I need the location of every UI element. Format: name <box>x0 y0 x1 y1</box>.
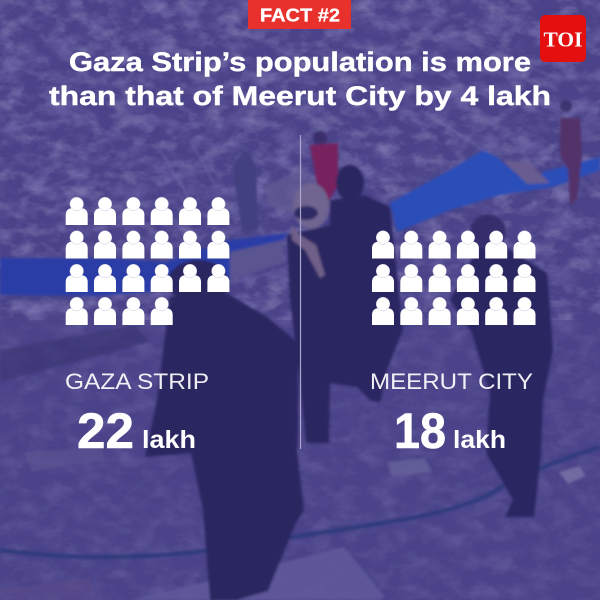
value: 18 lakh: lakh <box>453 426 506 454</box>
value: 18 lakh <box>394 403 506 459</box>
rubble beams <box>0 20 560 200</box>
standing person far right <box>560 100 582 205</box>
value: 18 lakh: 18 <box>394 403 446 459</box>
woman centre left <box>287 183 332 443</box>
title: Gaza Strip’s population is more <box>69 47 531 77</box>
centre divider line <box>300 135 302 449</box>
value: 22 lakh: lakh <box>142 426 196 454</box>
standing person in red <box>310 131 338 202</box>
pictogram: Gaza Strip, 22 people <box>66 197 229 325</box>
blue tarp right <box>390 150 600 232</box>
fact badge <box>248 0 351 29</box>
woman foreground <box>145 260 304 600</box>
value: 22 lakh: 22 <box>77 403 134 459</box>
TOI logo: TOI <box>544 28 582 52</box>
blue tarp left <box>0 233 288 296</box>
hose <box>0 447 600 557</box>
tan lump under tarp <box>503 160 550 184</box>
value: 22 lakh <box>77 403 196 459</box>
label: Meerut City: MEERUT CITY <box>370 369 533 394</box>
woman right <box>450 214 553 517</box>
pictogram: Meerut City, 18 people <box>372 231 536 325</box>
woman centre right <box>330 165 403 403</box>
label: Gaza Strip: GAZA STRIP <box>65 369 209 394</box>
fact badge: FACT #2 <box>260 6 340 26</box>
title: than that of Meerut City by 4 lakh <box>49 81 551 111</box>
TOI logo <box>540 15 586 62</box>
title <box>49 47 551 111</box>
person in rubble <box>233 150 258 232</box>
